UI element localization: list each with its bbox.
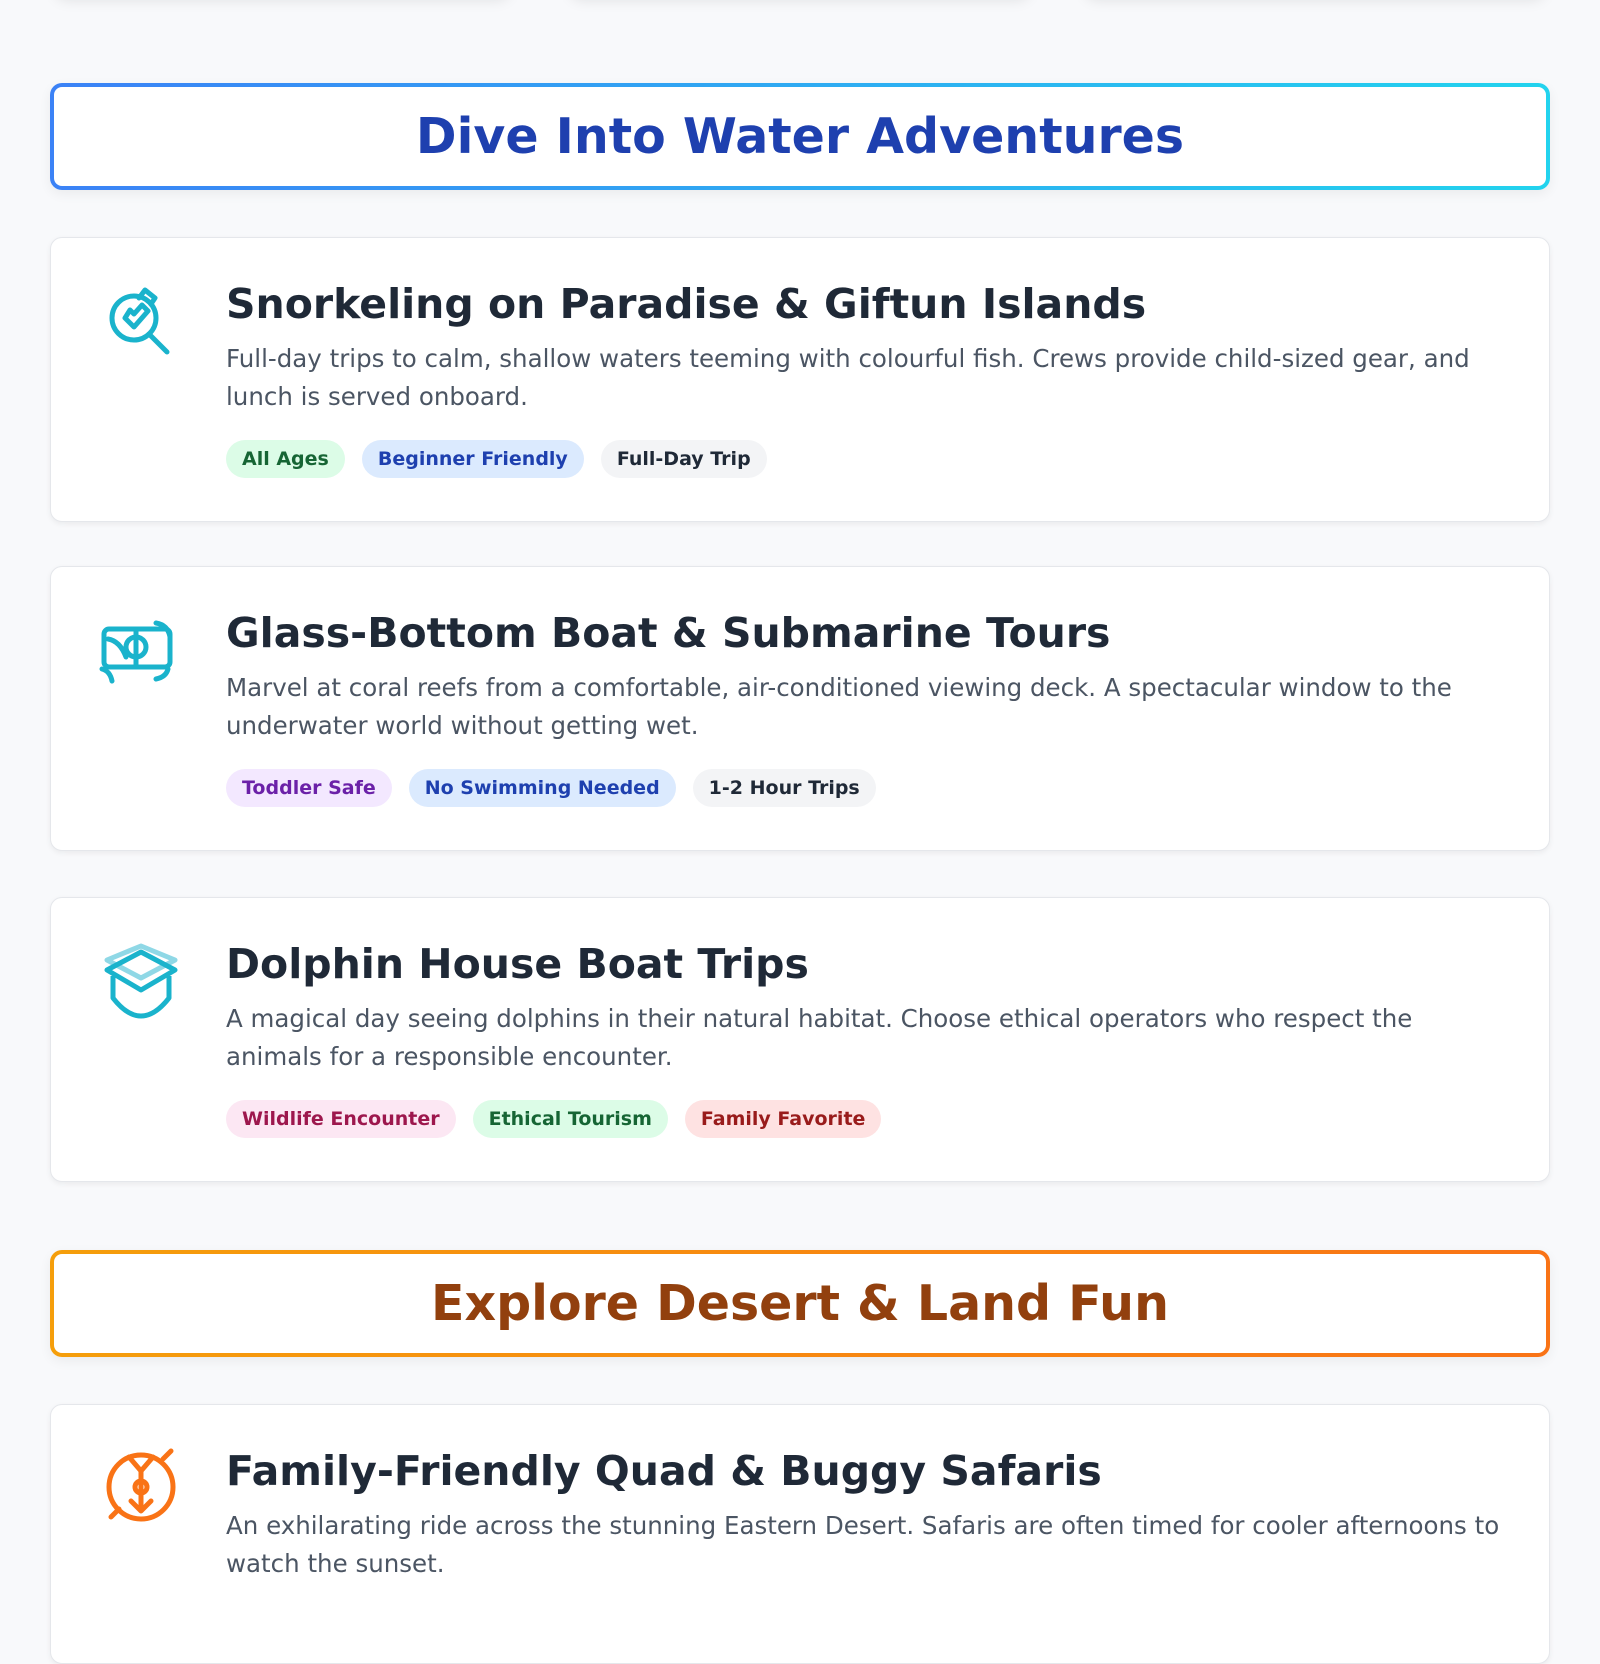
title: Glass-Bottom Boat & Submarine Tours (226, 609, 1110, 657)
heading: desert fun (50, 1250, 1550, 1357)
icon: boat window (100, 620, 172, 684)
description (226, 1511, 1499, 1578)
tags: Beginner Friendly (378, 448, 568, 470)
description: Full-day trips to calm, shallow waters teeming with colourful fish. Crews provide child-sized gear, and lunch is served onboard. (226, 344, 1470, 411)
heading: desert fun: Explore Desert & Land Fun (431, 1275, 1169, 1332)
description: watch the sunset. (226, 1549, 444, 1578)
previous cards (62, 0, 1538, 3)
title: Snorkeling on Paradise & Giftun Islands (226, 280, 1146, 328)
tags: Ethical Tourism (489, 1108, 652, 1130)
tags: 1-2 Hour Trips (709, 777, 860, 799)
description: An exhilarating ride across the stunning Eastern Desert. Safaris are often timed for cooler afternoons to (226, 1511, 1499, 1540)
description: A magical day seeing dolphins in their natural habitat. Choose ethical operators who respect the (226, 1004, 1412, 1033)
description: animals for a responsible encounter. (226, 1042, 673, 1071)
panel: snorkeling (50, 237, 1550, 522)
icon: layered cap (104, 944, 178, 1018)
tags: All Ages (242, 448, 329, 470)
icon: snorkel magnifier (110, 288, 170, 354)
panel: glass-bottom boat (50, 566, 1550, 851)
tags: Toddler Safe (242, 777, 376, 799)
description (226, 1004, 1412, 1071)
tags: Wildlife Encounter (242, 1108, 440, 1130)
panel: dolphin house (50, 897, 1550, 1182)
panel: quad safaris (50, 1404, 1550, 1664)
heading: water adventures (50, 83, 1550, 190)
title: Dolphin House Boat Trips (226, 940, 809, 988)
title: Family-Friendly Quad & Buggy Safaris (226, 1447, 1102, 1495)
tags: Full-Day Trip (617, 448, 751, 470)
description: Marvel at coral reefs from a comfortable, air-conditioned viewing deck. A spectacular window to the underwater world without getting wet. (226, 673, 1452, 740)
icon: compass (106, 1448, 176, 1522)
tags (226, 440, 767, 478)
tags (226, 1100, 881, 1138)
tags (226, 769, 876, 807)
tags: No Swimming Needed (425, 777, 660, 799)
tags: Family Favorite (701, 1108, 865, 1130)
heading: water adventures: Dive Into Water Adventures (416, 108, 1184, 165)
